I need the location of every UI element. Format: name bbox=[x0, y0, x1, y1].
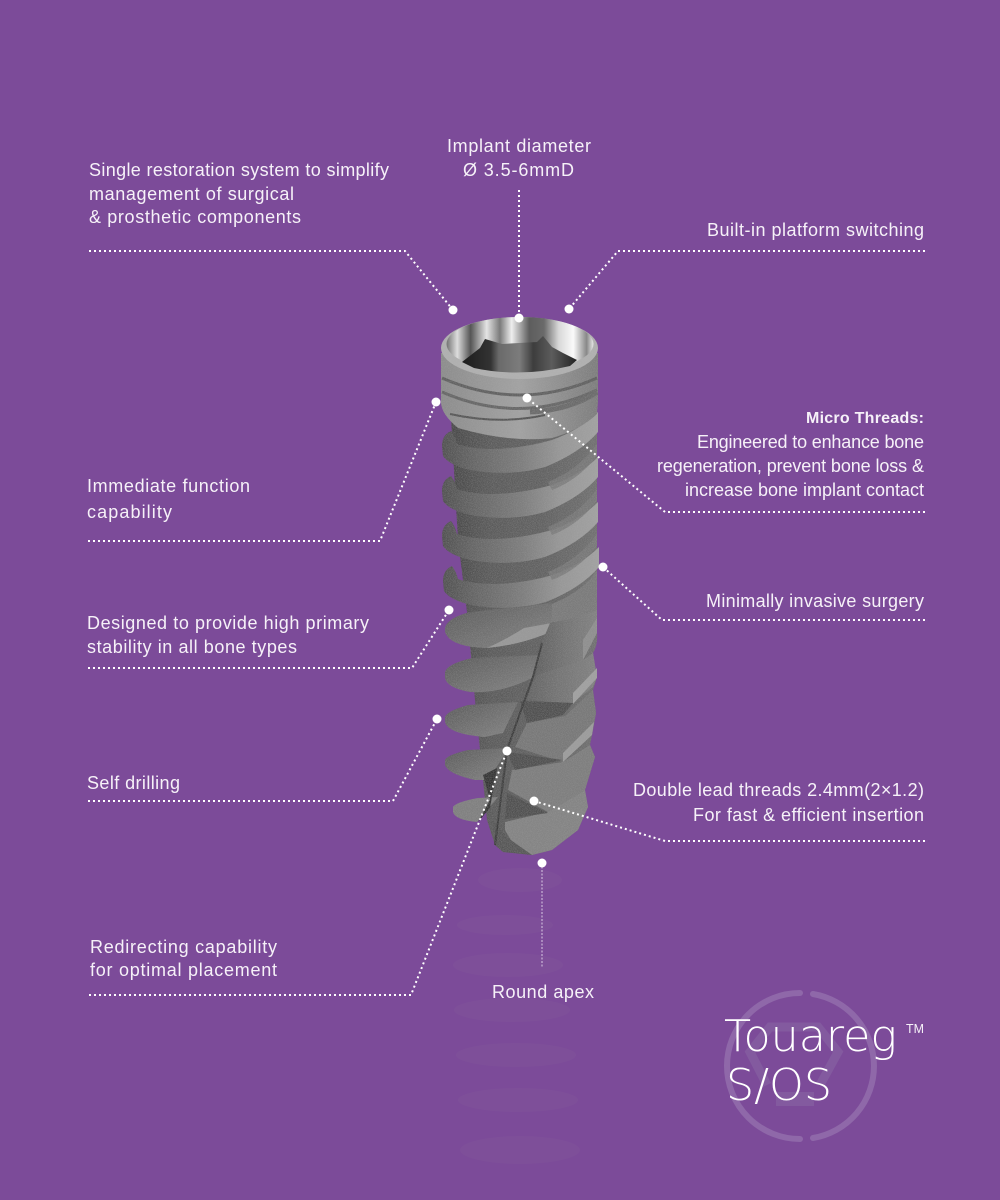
secondary helix highlights bbox=[548, 444, 597, 580]
implant core body bbox=[450, 400, 597, 855]
label: primary stability: Designed to provide high primary bbox=[87, 613, 369, 633]
label: self drilling: Self drilling bbox=[87, 773, 180, 793]
label: redirecting capability bbox=[90, 937, 277, 980]
lower left thread discs bbox=[445, 603, 552, 822]
label: double lead threads bbox=[633, 780, 924, 825]
implant top metal bore bbox=[446, 317, 594, 373]
label: micro threads: Micro Threads: bbox=[806, 410, 924, 427]
lower right thread discs bbox=[492, 570, 597, 855]
label: platform switching: Built-in platform switching bbox=[707, 220, 924, 240]
cutting flute wedges bbox=[505, 701, 573, 819]
label: single restoration system: Single restoration system to simplify bbox=[89, 160, 389, 180]
label: round apex: Round apex bbox=[492, 982, 594, 1002]
logo wordmark bbox=[724, 1011, 924, 1111]
label: immediate function: capability bbox=[87, 502, 172, 522]
label: redirecting capability: Redirecting capability bbox=[90, 937, 277, 957]
label: immediate function bbox=[87, 476, 250, 522]
label: micro threads: regeneration, prevent bone loss & bbox=[657, 456, 924, 476]
label: primary stability bbox=[87, 613, 369, 657]
label: single restoration system: management of surgical bbox=[89, 184, 294, 204]
label: double lead threads: For fast & efficient insertion bbox=[693, 805, 924, 825]
label: micro threads bbox=[657, 410, 924, 500]
label: primary stability: stability in all bone types bbox=[87, 637, 297, 657]
label: micro threads: increase bone implant contact bbox=[685, 480, 924, 500]
upper helical threads bbox=[442, 412, 599, 608]
leader lines bbox=[88, 190, 925, 995]
rim bbox=[441, 317, 598, 379]
label: redirecting capability: for optimal placement bbox=[90, 960, 277, 980]
label: implant diameter: Implant diameter bbox=[447, 136, 591, 156]
logo wordmark: Touareg bbox=[724, 1011, 897, 1062]
label: single restoration system: & prosthetic components bbox=[89, 207, 301, 227]
label: immediate function: Immediate function bbox=[87, 476, 250, 496]
flute line bbox=[495, 643, 542, 845]
leader dots bbox=[432, 304, 608, 868]
logo wordmark: S/OS bbox=[726, 1060, 832, 1111]
logo ring emblem bbox=[727, 993, 874, 1139]
label: double lead threads: Double lead threads 2.4mm(2×1.2) bbox=[633, 780, 924, 800]
label: minimally invasive: Minimally invasive surgery bbox=[706, 591, 924, 611]
label: single restoration system bbox=[89, 160, 389, 227]
implant reflection bbox=[453, 868, 580, 1164]
label: implant diameter: Ø 3.5-6mmD bbox=[463, 160, 574, 180]
label: micro threads: Engineered to enhance bone bbox=[697, 432, 924, 452]
label: implant diameter bbox=[447, 136, 591, 180]
micro threads collar bbox=[441, 353, 598, 439]
logo wordmark: TM bbox=[906, 1021, 924, 1036]
implant bbox=[441, 317, 599, 855]
hex socket bbox=[462, 336, 577, 373]
